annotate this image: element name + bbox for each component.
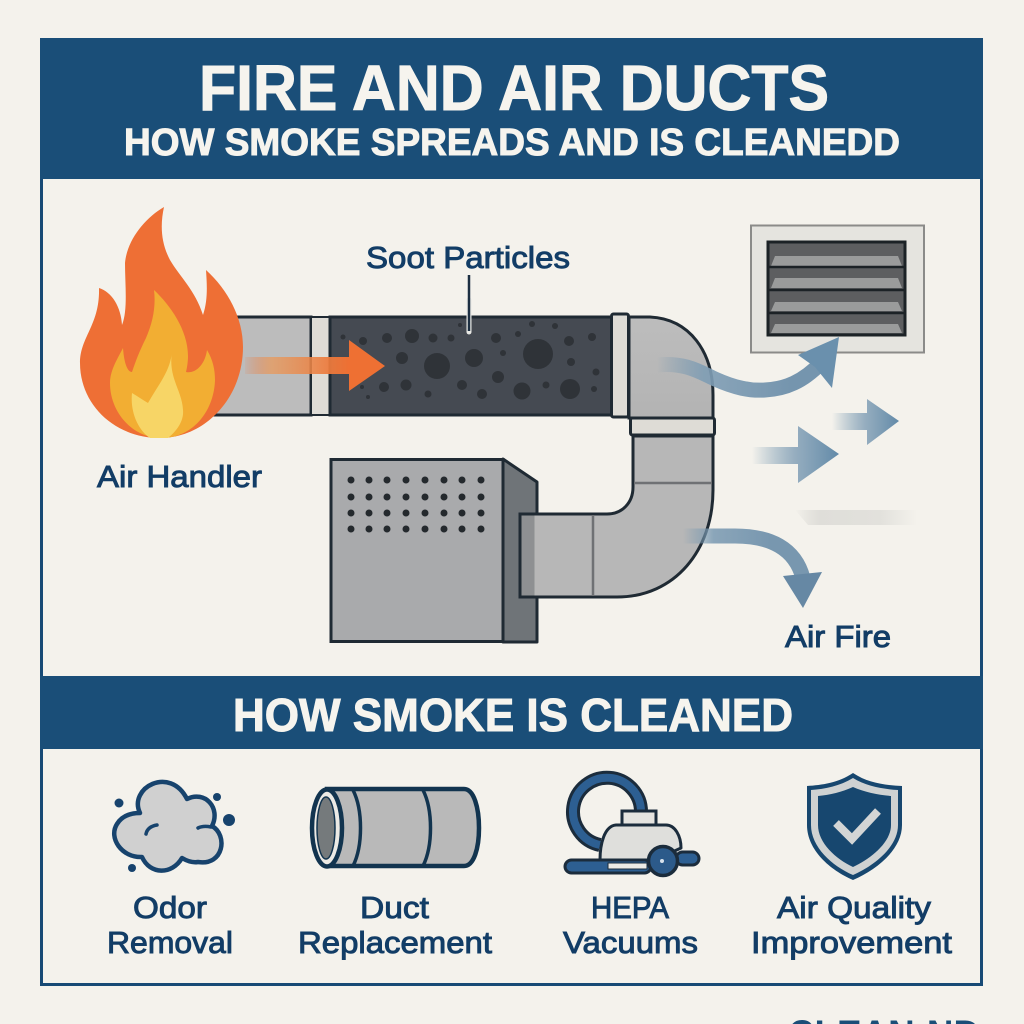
label: odor removal: Odor [133,890,207,925]
section band: how smoke is cleaned [40,676,983,749]
flame icon [80,207,243,438]
lower elbow duct [520,436,713,597]
section heading: HOW SMOKE IS CLEANED [233,689,793,741]
item: air quality improvement [751,773,952,960]
label: hepa vacuums: HEPA [591,890,669,925]
air handler box [331,459,537,642]
item: odor removal [107,782,235,960]
panel: duct diagram [80,207,924,654]
label: air handler: Air Handler [97,459,262,494]
label: air quality improvement: Air Quality [777,890,932,925]
item: hepa vacuums [563,778,699,960]
label: air fire: Air Fire [785,619,891,654]
label: hepa vacuums [563,890,698,960]
label: duct replacement: Replacement [298,925,492,960]
label: air quality improvement [751,890,952,960]
item: duct replacement [298,789,492,960]
blue air arrow to register [657,337,839,390]
upper duct clean section [215,317,330,415]
duct collar vertical [612,314,628,417]
upper elbow [629,317,713,418]
label: hepa vacuums: Vacuums [563,925,698,960]
icon: vacuum [565,778,699,876]
label: air quality improvement: Improvement [751,925,952,960]
orange flow arrow [245,340,385,391]
title header [40,38,983,179]
blue air arrow middle [752,426,839,483]
icon: duct section [312,789,479,866]
faint smoke smudge [795,510,917,525]
panel: cleaning methods [107,773,952,960]
leader line [466,275,472,332]
label: odor removal [107,890,233,960]
wall register vent [751,226,924,352]
label: duct replacement: Duct [360,890,429,925]
icon: shield with check [807,773,902,880]
label: odor removal: Removal [107,925,233,960]
blue air arrow down [683,536,822,608]
blue air arrow right [832,399,899,445]
icon: smoke cloud [114,782,235,872]
title: FIRE AND AIR DUCTS [199,52,829,124]
subtitle: HOW SMOKE SPREADS AND IS CLEANEDD [124,122,900,164]
label: duct replacement [298,890,492,960]
soot-filled duct section [330,317,612,415]
label: soot particles: Soot Particles [366,240,570,275]
duct collar horizontal [630,418,714,435]
